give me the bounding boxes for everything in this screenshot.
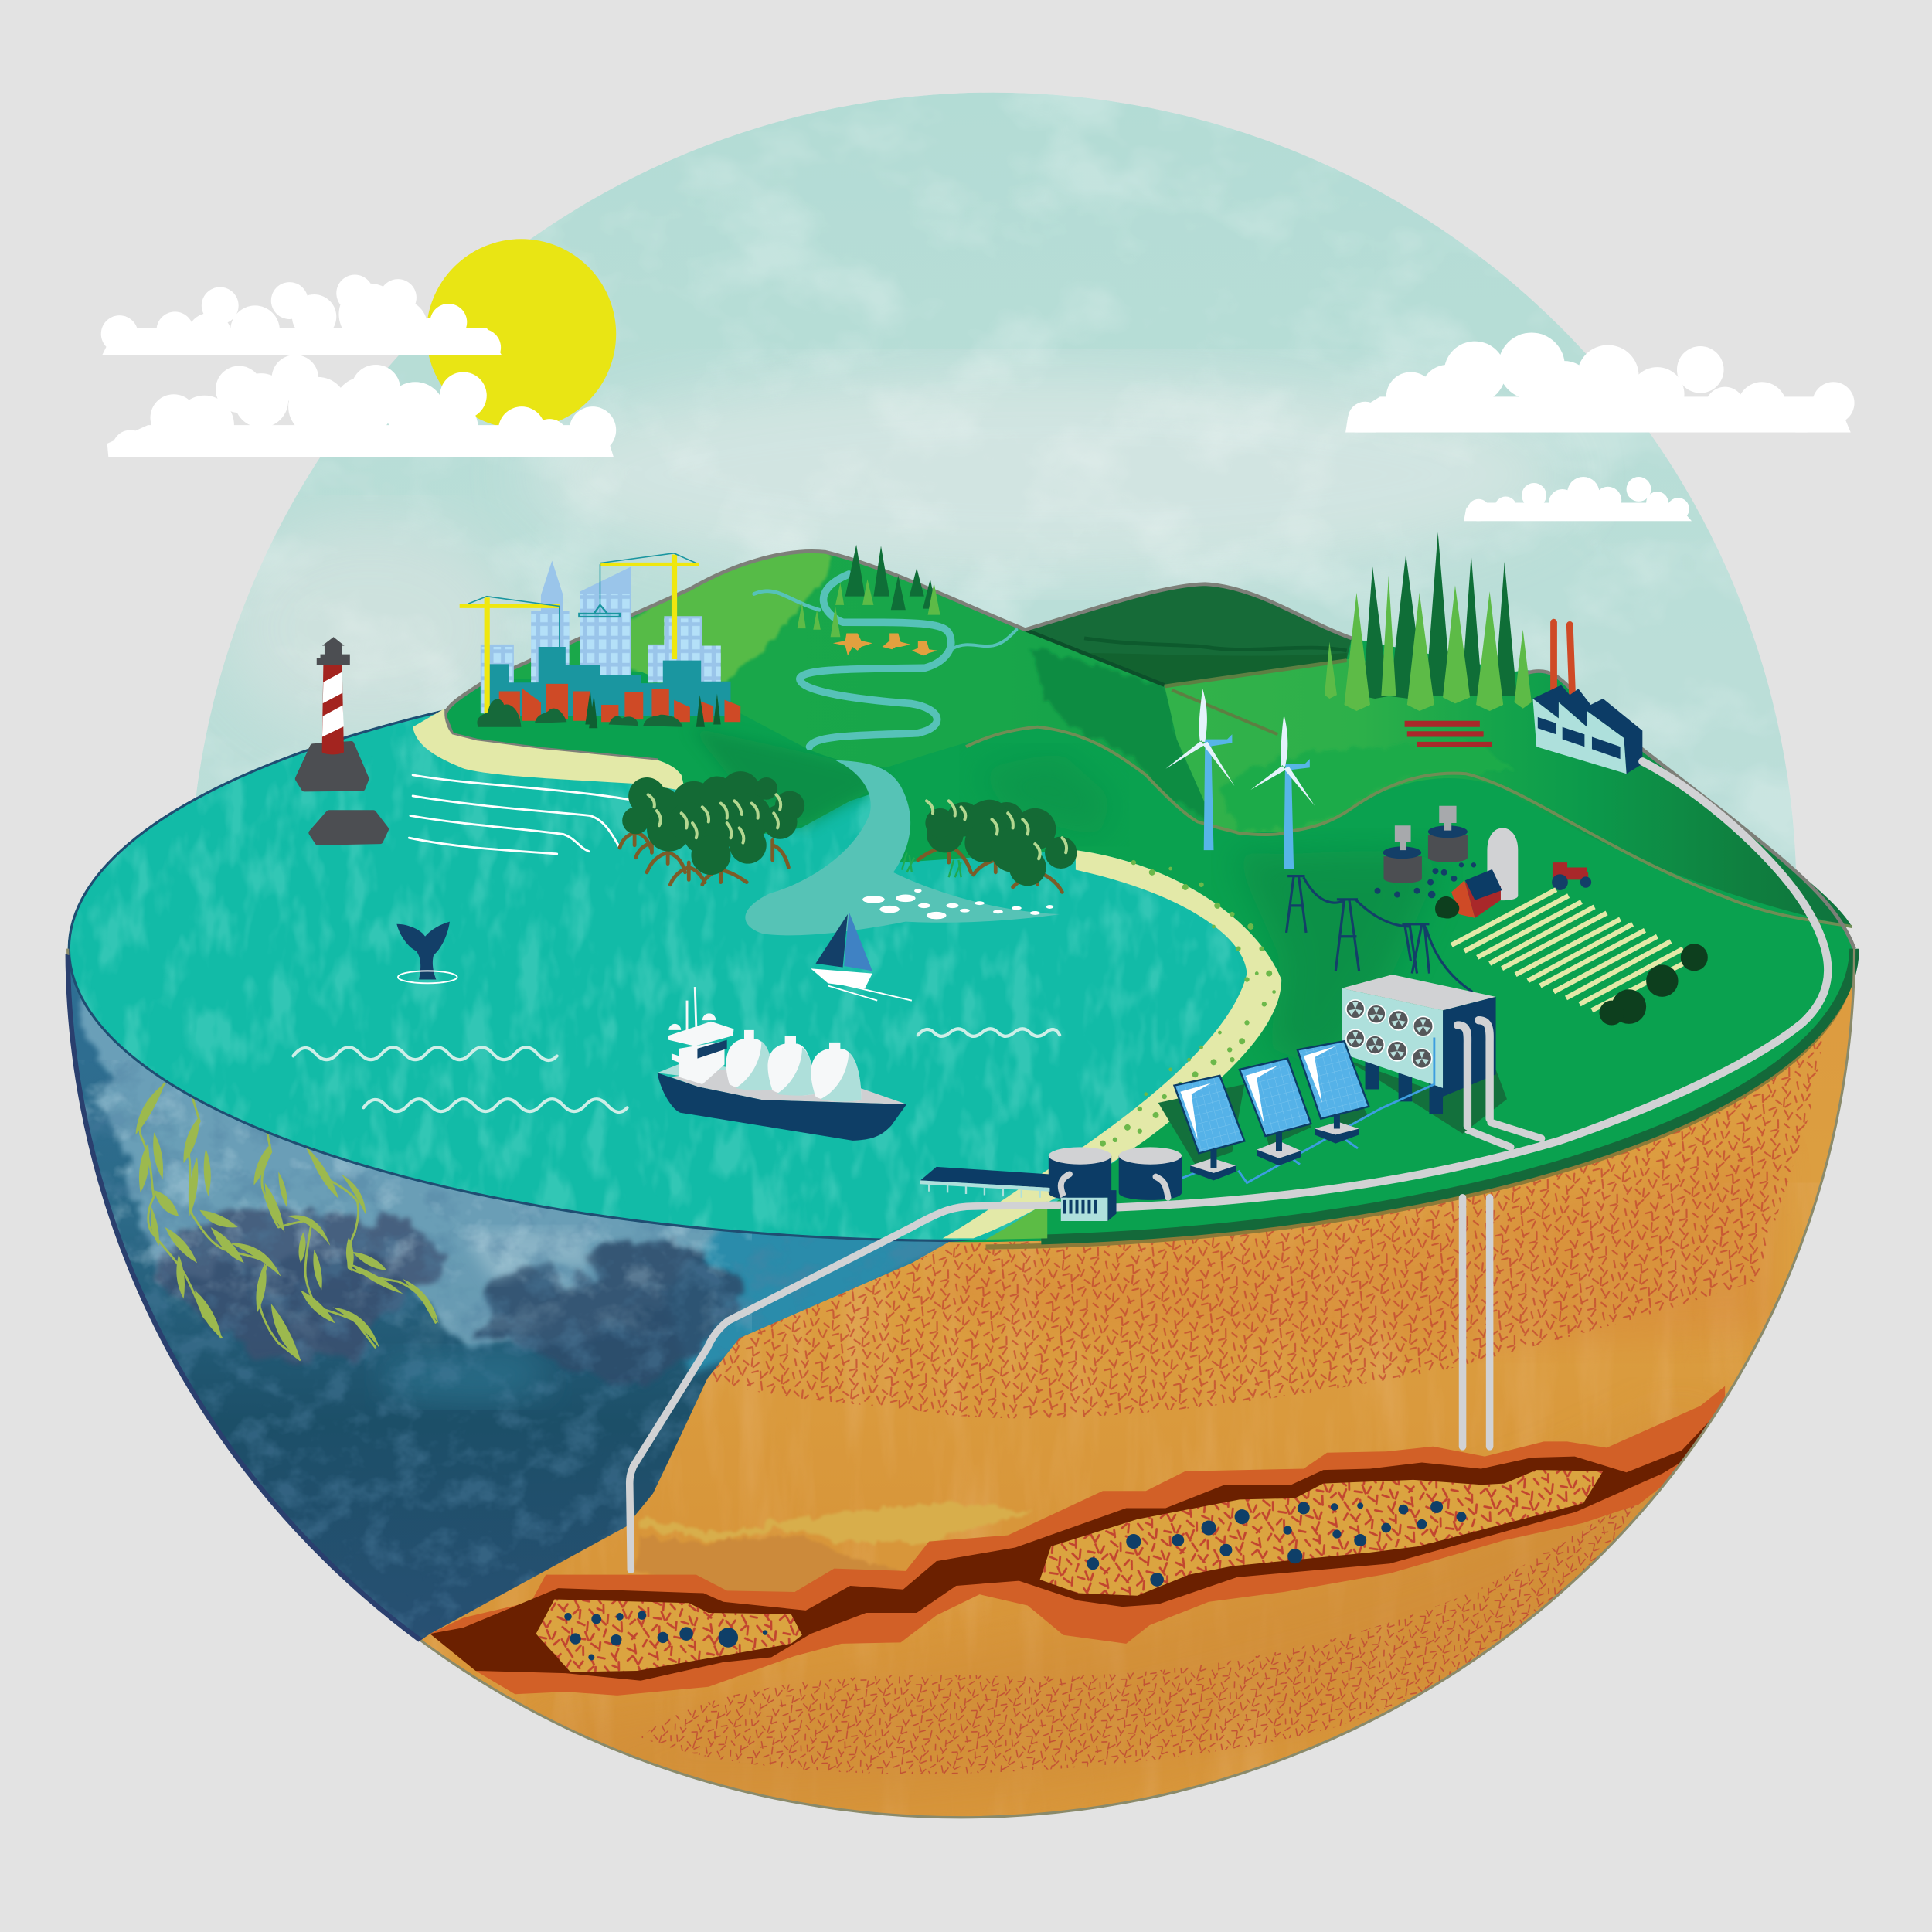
oil droplets right bbox=[1087, 1501, 1466, 1587]
ripples bbox=[398, 971, 457, 983]
rim pipe bbox=[1115, 761, 1828, 1207]
jetty bbox=[920, 1167, 1049, 1198]
land base bbox=[445, 551, 1855, 1242]
mangrove roots bbox=[918, 840, 1062, 892]
bow deck bbox=[658, 1060, 906, 1104]
waves bbox=[293, 1029, 1060, 1112]
seaweed stems bbox=[140, 1083, 436, 1360]
panel stands bbox=[1190, 1122, 1359, 1180]
turbine one blades bbox=[1165, 689, 1235, 786]
mid shelf bbox=[672, 1053, 725, 1070]
dark hill lower half bbox=[1078, 653, 1347, 685]
teal blocks bbox=[489, 647, 730, 716]
storage tanks bbox=[1049, 1147, 1182, 1205]
wake bbox=[828, 983, 912, 1001]
deck bbox=[920, 1167, 1049, 1188]
front bbox=[1342, 988, 1443, 1088]
digester two nozzle bbox=[1439, 806, 1457, 831]
sand dots bbox=[1092, 860, 1276, 1158]
tank one bbox=[726, 1030, 774, 1090]
river main channel bbox=[800, 574, 951, 747]
cloud: lower left bbox=[107, 355, 616, 467]
city trees bbox=[585, 690, 721, 728]
pylon two bbox=[1335, 900, 1359, 971]
turbine two tower bbox=[1284, 767, 1294, 869]
panel shadows bbox=[1158, 1060, 1368, 1165]
light conifers bbox=[1325, 576, 1532, 711]
sea water cross-section bbox=[49, 949, 1035, 1713]
shrub bbox=[1435, 896, 1459, 919]
turbine one tower bbox=[1204, 742, 1213, 850]
power pylons and lines bbox=[1287, 876, 1472, 992]
grass strip at shore bbox=[986, 1202, 1047, 1240]
river upper stream bbox=[754, 591, 819, 610]
pale haze on the left of the sky bbox=[222, 518, 518, 740]
land surface bbox=[445, 543, 1855, 1247]
mangrove east bbox=[902, 800, 1077, 892]
light green on hill one bbox=[591, 543, 830, 684]
tractor bbox=[1552, 862, 1591, 890]
silo bbox=[1487, 828, 1518, 900]
panel three bbox=[1298, 1041, 1369, 1119]
soil shadow under land rim bbox=[986, 952, 1855, 1247]
data center bbox=[1342, 975, 1507, 1134]
water layer: mottled light noise bbox=[62, 1060, 752, 1368]
chimneys bbox=[1554, 622, 1572, 692]
reservoir pocket right bbox=[1040, 1470, 1603, 1596]
west beach bbox=[413, 709, 685, 791]
mangrove highlights bbox=[927, 801, 1066, 859]
stand tops bbox=[1190, 1122, 1359, 1173]
cloud: upper left bbox=[100, 275, 502, 355]
tail bbox=[396, 922, 450, 980]
sky disc bbox=[196, 93, 1796, 869]
lower grass on right hillside bbox=[1219, 740, 1515, 833]
right hillside bbox=[1146, 659, 1852, 927]
mangrove canopy bbox=[925, 800, 1077, 886]
front gable bbox=[1451, 880, 1475, 918]
layer: lower fleck band bbox=[641, 1497, 1639, 1774]
water layer: turquoise near shore bbox=[665, 1219, 961, 1374]
mangrove canopy bbox=[622, 771, 804, 875]
panel two bbox=[1240, 1059, 1311, 1136]
water layer: smoky dark right bbox=[473, 1237, 740, 1387]
water layer: mottled dark noise bbox=[62, 1060, 949, 1651]
layer: darker strata under the pale band bbox=[634, 1535, 897, 1592]
city shrubs bbox=[477, 699, 682, 727]
light conifers bbox=[798, 579, 940, 637]
mangrove highlights bbox=[648, 794, 781, 843]
digester two bbox=[1428, 835, 1468, 862]
seaweed bbox=[135, 1083, 439, 1360]
tower stripes bbox=[322, 672, 344, 736]
tank three shadow bbox=[821, 1053, 861, 1102]
windows bbox=[1538, 717, 1621, 759]
panel two glare bbox=[1246, 1066, 1277, 1124]
vents bbox=[1065, 1200, 1095, 1213]
windows bbox=[697, 1040, 727, 1059]
land rim bbox=[1041, 949, 1855, 1240]
turbine two blades bbox=[1250, 715, 1315, 806]
front bbox=[1061, 1198, 1107, 1221]
lower rock bbox=[311, 813, 386, 842]
piles bbox=[929, 1184, 1040, 1198]
dark conifers bbox=[845, 545, 937, 610]
offshore pipe bbox=[630, 1205, 1060, 1570]
western slope shade bbox=[690, 727, 881, 828]
dark conifers bbox=[1362, 532, 1517, 699]
dark hill left edge bbox=[1026, 630, 1165, 685]
dark hill lower edge bbox=[1165, 661, 1347, 686]
wiring bbox=[1179, 1037, 1434, 1183]
river branch bbox=[954, 630, 1016, 648]
well pipe one bbox=[1461, 1198, 1465, 1447]
biogas plant bbox=[1375, 806, 1476, 898]
bridge deck bbox=[668, 1022, 733, 1046]
digester two cap bbox=[1428, 825, 1468, 838]
sea rim bbox=[68, 949, 1855, 1818]
seaweed leaves bbox=[135, 1083, 439, 1360]
pipeline from factory along the rim bbox=[630, 761, 1828, 1570]
side bbox=[1443, 997, 1496, 1097]
deck edge bbox=[920, 1180, 1049, 1192]
white foam patches bbox=[862, 889, 1053, 919]
funnel domes bbox=[668, 1013, 716, 1030]
lantern room bbox=[317, 637, 350, 665]
legs bbox=[1366, 1060, 1443, 1114]
solar panels bbox=[1158, 1037, 1434, 1183]
water layer: teal mid glow bbox=[382, 1349, 554, 1405]
power lines bbox=[1304, 877, 1472, 992]
layer: pale sandy strata bbox=[637, 1502, 1032, 1543]
panel one bbox=[1174, 1076, 1244, 1153]
cloud: upper right bbox=[1345, 332, 1855, 436]
sailboat bbox=[811, 912, 912, 1001]
pale haze in the middle of the sky bbox=[530, 369, 1565, 579]
tank left lid bbox=[1049, 1147, 1111, 1165]
body bbox=[1553, 862, 1588, 879]
side wall bbox=[1465, 883, 1501, 918]
tank two bbox=[768, 1036, 815, 1095]
masts bbox=[687, 987, 696, 1030]
digester one nozzle bbox=[1395, 825, 1411, 850]
tower windows bbox=[481, 594, 721, 713]
layer: orange upper strata bbox=[952, 1167, 1770, 1337]
datacenter pipe branch bbox=[1468, 1122, 1542, 1147]
dark hill crease bbox=[1084, 638, 1347, 651]
barn bbox=[1435, 869, 1502, 919]
right forest bbox=[1325, 532, 1532, 711]
tower bbox=[322, 665, 344, 754]
orange mantle bbox=[430, 1386, 1725, 1696]
exhaust pipes bbox=[1458, 1020, 1490, 1126]
shadow bbox=[1347, 1060, 1507, 1134]
winding river bbox=[754, 574, 1016, 747]
water layer: smoky dark left bbox=[154, 1206, 451, 1362]
light blue towers bbox=[481, 560, 721, 713]
oil droplets left bbox=[564, 1611, 767, 1660]
tank right lid bbox=[1119, 1147, 1182, 1165]
water surface bbox=[62, 653, 1855, 1244]
wheels bbox=[1552, 874, 1568, 890]
green hill one bbox=[487, 551, 1213, 823]
dark back hill bbox=[1026, 584, 1352, 685]
sail dark bbox=[815, 914, 848, 968]
tank left bbox=[1049, 1156, 1111, 1200]
textured dark band on hill one bbox=[1029, 647, 1213, 823]
sun bbox=[427, 239, 616, 429]
tank one shadow bbox=[736, 1041, 774, 1090]
ridge line bbox=[966, 727, 1852, 927]
crane right bbox=[600, 554, 699, 659]
dark bushes bbox=[1600, 944, 1708, 1026]
bowl rim bbox=[68, 949, 1855, 1818]
pylon one bbox=[1287, 876, 1306, 933]
fold line bbox=[1172, 690, 1277, 734]
water layer: light blue upper zone bbox=[74, 986, 788, 1349]
panel one glare bbox=[1180, 1083, 1211, 1140]
hill forest bbox=[798, 545, 940, 655]
sail blue bbox=[844, 912, 872, 971]
superstructure lower block bbox=[679, 1041, 725, 1084]
facade bbox=[1532, 699, 1627, 774]
turbine two nacelle bbox=[1284, 759, 1310, 770]
stand posts bbox=[1213, 1115, 1337, 1168]
tank two shadow bbox=[776, 1047, 815, 1096]
top bbox=[1342, 975, 1496, 1010]
digester bubbles bbox=[1375, 862, 1476, 898]
crane cables bbox=[468, 553, 696, 647]
reeds bbox=[902, 852, 961, 877]
crop field bbox=[1451, 889, 1693, 1010]
crane load bbox=[579, 605, 620, 617]
fan blades bbox=[1349, 1002, 1430, 1065]
mangrove roots bbox=[620, 828, 788, 885]
roof bbox=[1465, 869, 1502, 900]
turbine one nacelle bbox=[1202, 734, 1232, 747]
shoreline ripples bbox=[409, 775, 630, 854]
well pipe two bbox=[1488, 1198, 1492, 1447]
hull bbox=[811, 968, 872, 988]
shade below the first ridge bbox=[974, 752, 1115, 838]
hill outline bbox=[445, 551, 1855, 949]
oil and gas seam bbox=[430, 1386, 1725, 1696]
rock under lighthouse bbox=[298, 744, 366, 788]
city bbox=[460, 553, 740, 728]
red blocks bbox=[499, 684, 740, 722]
side and roof bbox=[1061, 1190, 1117, 1221]
LNG ship bbox=[658, 987, 906, 1141]
hull bbox=[658, 1073, 906, 1141]
water layer: pale haze patch bbox=[462, 1230, 591, 1281]
layer: darker lower strata bbox=[572, 1490, 1658, 1798]
roof and side bbox=[1532, 685, 1642, 774]
tank right bbox=[1119, 1156, 1182, 1200]
log piles bbox=[1405, 721, 1492, 747]
pump station bbox=[1061, 1190, 1117, 1221]
tank pipes bbox=[1061, 1174, 1168, 1205]
dark rock layer bbox=[430, 1405, 1725, 1681]
digester one cap bbox=[1383, 846, 1421, 859]
pylon three bbox=[1402, 924, 1429, 974]
estuary bbox=[745, 760, 1060, 935]
digester one bbox=[1383, 856, 1422, 883]
land shade patches bbox=[1232, 850, 1441, 1072]
wind turbines bbox=[1165, 689, 1315, 869]
grey deck bbox=[670, 1070, 906, 1104]
reservoir pocket left bbox=[536, 1600, 802, 1672]
whale tail bbox=[396, 922, 457, 983]
mangrove west bbox=[620, 771, 804, 885]
crane left bbox=[460, 597, 560, 717]
lighthouse bbox=[298, 637, 386, 842]
cloud: small right bbox=[1464, 477, 1692, 521]
layer: upper fleck band bbox=[707, 961, 1836, 1418]
east beach bbox=[943, 850, 1281, 1238]
panel three glare bbox=[1304, 1046, 1335, 1103]
tank three bbox=[811, 1043, 861, 1101]
underground earth cross-section bbox=[422, 985, 1852, 1816]
tree stumps bbox=[833, 634, 937, 655]
fans bbox=[1346, 1000, 1433, 1068]
factory bbox=[1532, 622, 1642, 774]
